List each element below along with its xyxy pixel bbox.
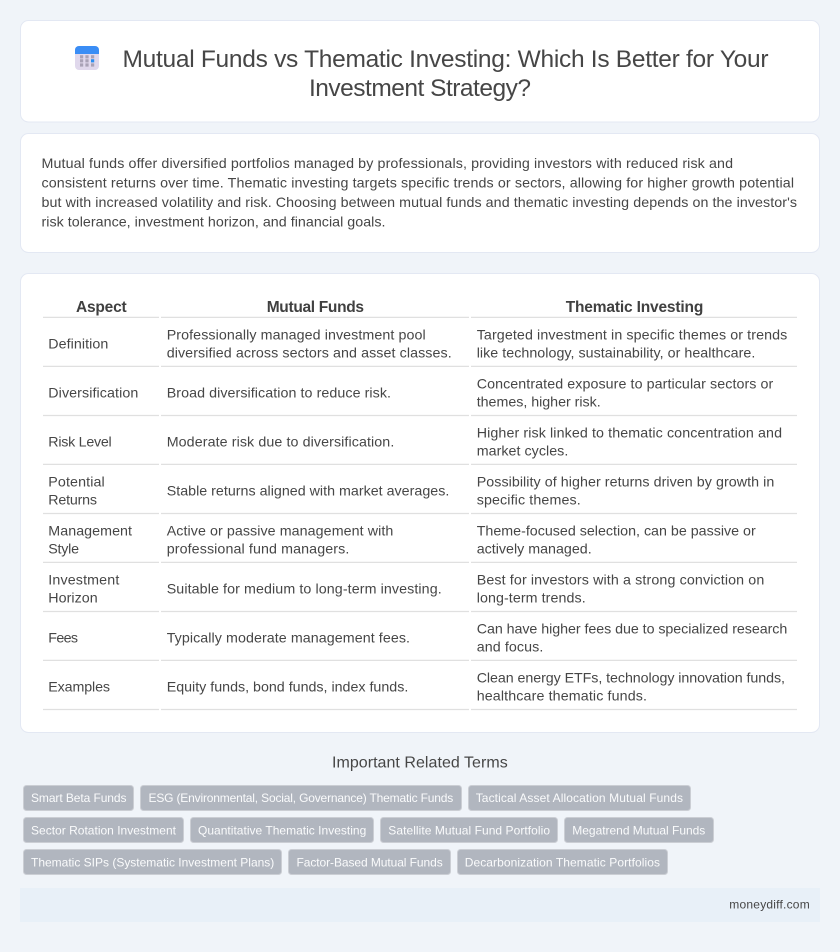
- row: definition: Definition: [48, 336, 108, 352]
- row: definition: Professionally managed investment pool: [167, 327, 426, 343]
- tag: esg thematic funds: [140, 786, 462, 810]
- row: investment horizon: Best for investors with a strong conviction on: [477, 572, 764, 588]
- row: management style: Style: [48, 541, 79, 557]
- tag: thematic sips: [24, 850, 282, 874]
- row: potential returns: Potential: [48, 474, 105, 490]
- table header: [76, 299, 703, 316]
- row: investment horizon: [48, 572, 764, 606]
- footer: [20, 888, 820, 922]
- tag: quantitative thematic: [190, 818, 374, 842]
- tag: megatrend: Megatrend Mutual Funds: [572, 824, 705, 838]
- row: risk level: market cycles.: [477, 443, 568, 459]
- row: risk level: Higher risk linked to thematic concentration and: [477, 425, 782, 441]
- table header: Aspect: [76, 299, 127, 316]
- tag: factor-based: Factor-Based Mutual Funds: [296, 856, 443, 870]
- row: diversification: Broad diversification to reduce risk.: [167, 385, 391, 401]
- row: management style: professional fund managers.: [167, 541, 349, 557]
- row: fees: Can have higher fees due to specialized research: [477, 621, 787, 637]
- intro text: consistent returns over time. Thematic investing targets specific trends or sectors, allowing for higher growth potential: [42, 176, 794, 192]
- intro text: risk tolerance, investment horizon, and financial goals.: [42, 214, 386, 230]
- row: definition: diversified across sectors and asset classes.: [167, 345, 452, 361]
- row: investment horizon: Horizon: [48, 590, 98, 606]
- row: investment horizon: long-term trends.: [477, 590, 586, 606]
- panel: related term tags: [24, 786, 714, 874]
- tag: factor-based: [288, 850, 450, 874]
- title: [122, 46, 768, 102]
- row: diversification: [48, 376, 774, 410]
- tag: megatrend: [564, 818, 714, 842]
- tag: thematic sips: Thematic SIPs (Systematic Investment Plans): [31, 856, 274, 870]
- footer: moneydiff.com: [729, 897, 810, 911]
- tag: quantitative thematic: Quantitative Thematic Investing: [198, 824, 366, 838]
- tag: tactical asset allocation: Tactical Asset Allocation Mutual Funds: [476, 791, 683, 805]
- tag: esg thematic funds: ESG (Environmental, Social, Governance) Thematic Funds: [148, 791, 453, 805]
- row: potential returns: Stable returns aligned with market averages.: [167, 483, 449, 499]
- row: management style: Management: [48, 523, 132, 539]
- row: management style: actively managed.: [477, 541, 592, 557]
- tag: satellite portfolio: Satellite Mutual Fund Portfolio: [388, 824, 550, 838]
- intro text: Mutual funds offer diversified portfolios managed by professionals, providing investors with reduced risk and: [42, 156, 733, 172]
- row: definition: [48, 327, 787, 361]
- row: management style: Active or passive management with: [167, 523, 393, 539]
- row: management style: [48, 523, 756, 557]
- icon: calendar: [75, 46, 99, 70]
- row: examples: Examples: [48, 679, 110, 695]
- row: fees: Typically moderate management fees.: [167, 630, 410, 646]
- row: potential returns: [48, 474, 774, 508]
- table header: Mutual Funds: [267, 299, 364, 316]
- row: investment horizon: Suitable for medium to long-term investing.: [167, 581, 442, 597]
- row: examples: Equity funds, bond funds, index funds.: [167, 679, 408, 695]
- tag: smart beta funds: Smart Beta Funds: [31, 791, 126, 805]
- row: diversification: themes, higher risk.: [477, 394, 601, 410]
- row: examples: Clean energy ETFs, technology innovation funds,: [477, 670, 785, 686]
- row: fees: [48, 621, 787, 655]
- row: definition: like technology, sustainability, or healthcare.: [477, 345, 755, 361]
- panel: introduction: [20, 134, 820, 252]
- title: Mutual Funds vs Thematic Investing: Which Is Better for Your: [122, 46, 768, 73]
- heading: important related terms: Important Related Terms: [332, 755, 508, 772]
- row: risk level: [48, 425, 782, 459]
- tag: tactical asset allocation: [468, 786, 690, 810]
- row: examples: [48, 670, 785, 704]
- intro text: but with increased volatility and risk. Choosing between mutual funds and thematic investing depends on the investor's: [42, 195, 797, 211]
- row: examples: healthcare thematic funds.: [477, 688, 647, 704]
- header panel: [20, 20, 820, 122]
- row: investment horizon: Investment: [48, 572, 119, 588]
- row: potential returns: Possibility of higher returns driven by growth in: [477, 474, 774, 490]
- tag: sector rotation: Sector Rotation Investment: [31, 824, 177, 838]
- row: management style: Theme-focused selection, can be passive or: [477, 523, 756, 539]
- intro text: [42, 156, 797, 230]
- row: potential returns: Returns: [48, 492, 97, 508]
- row: risk level: Risk Level: [48, 434, 112, 450]
- panel: comparison table: [20, 274, 820, 732]
- title: Investment Strategy?: [309, 75, 531, 102]
- row: risk level: Moderate risk due to diversification.: [167, 434, 394, 450]
- row: fees: Fees: [48, 630, 78, 646]
- tag: satellite portfolio: [380, 818, 558, 842]
- row: definition: Targeted investment in specific themes or trends: [477, 327, 787, 343]
- tag: smart beta funds: [24, 786, 134, 810]
- row: diversification: Diversification: [48, 385, 138, 401]
- tag: decarbonization: Decarbonization Thematic Portfolios: [465, 856, 660, 870]
- row: diversification: Concentrated exposure to particular sectors or: [477, 376, 774, 392]
- row: potential returns: specific themes.: [477, 492, 581, 508]
- table header: Thematic Investing: [566, 299, 703, 316]
- row: fees: and focus.: [477, 639, 543, 655]
- tag: sector rotation: [24, 818, 184, 842]
- tag: decarbonization: [458, 850, 668, 874]
